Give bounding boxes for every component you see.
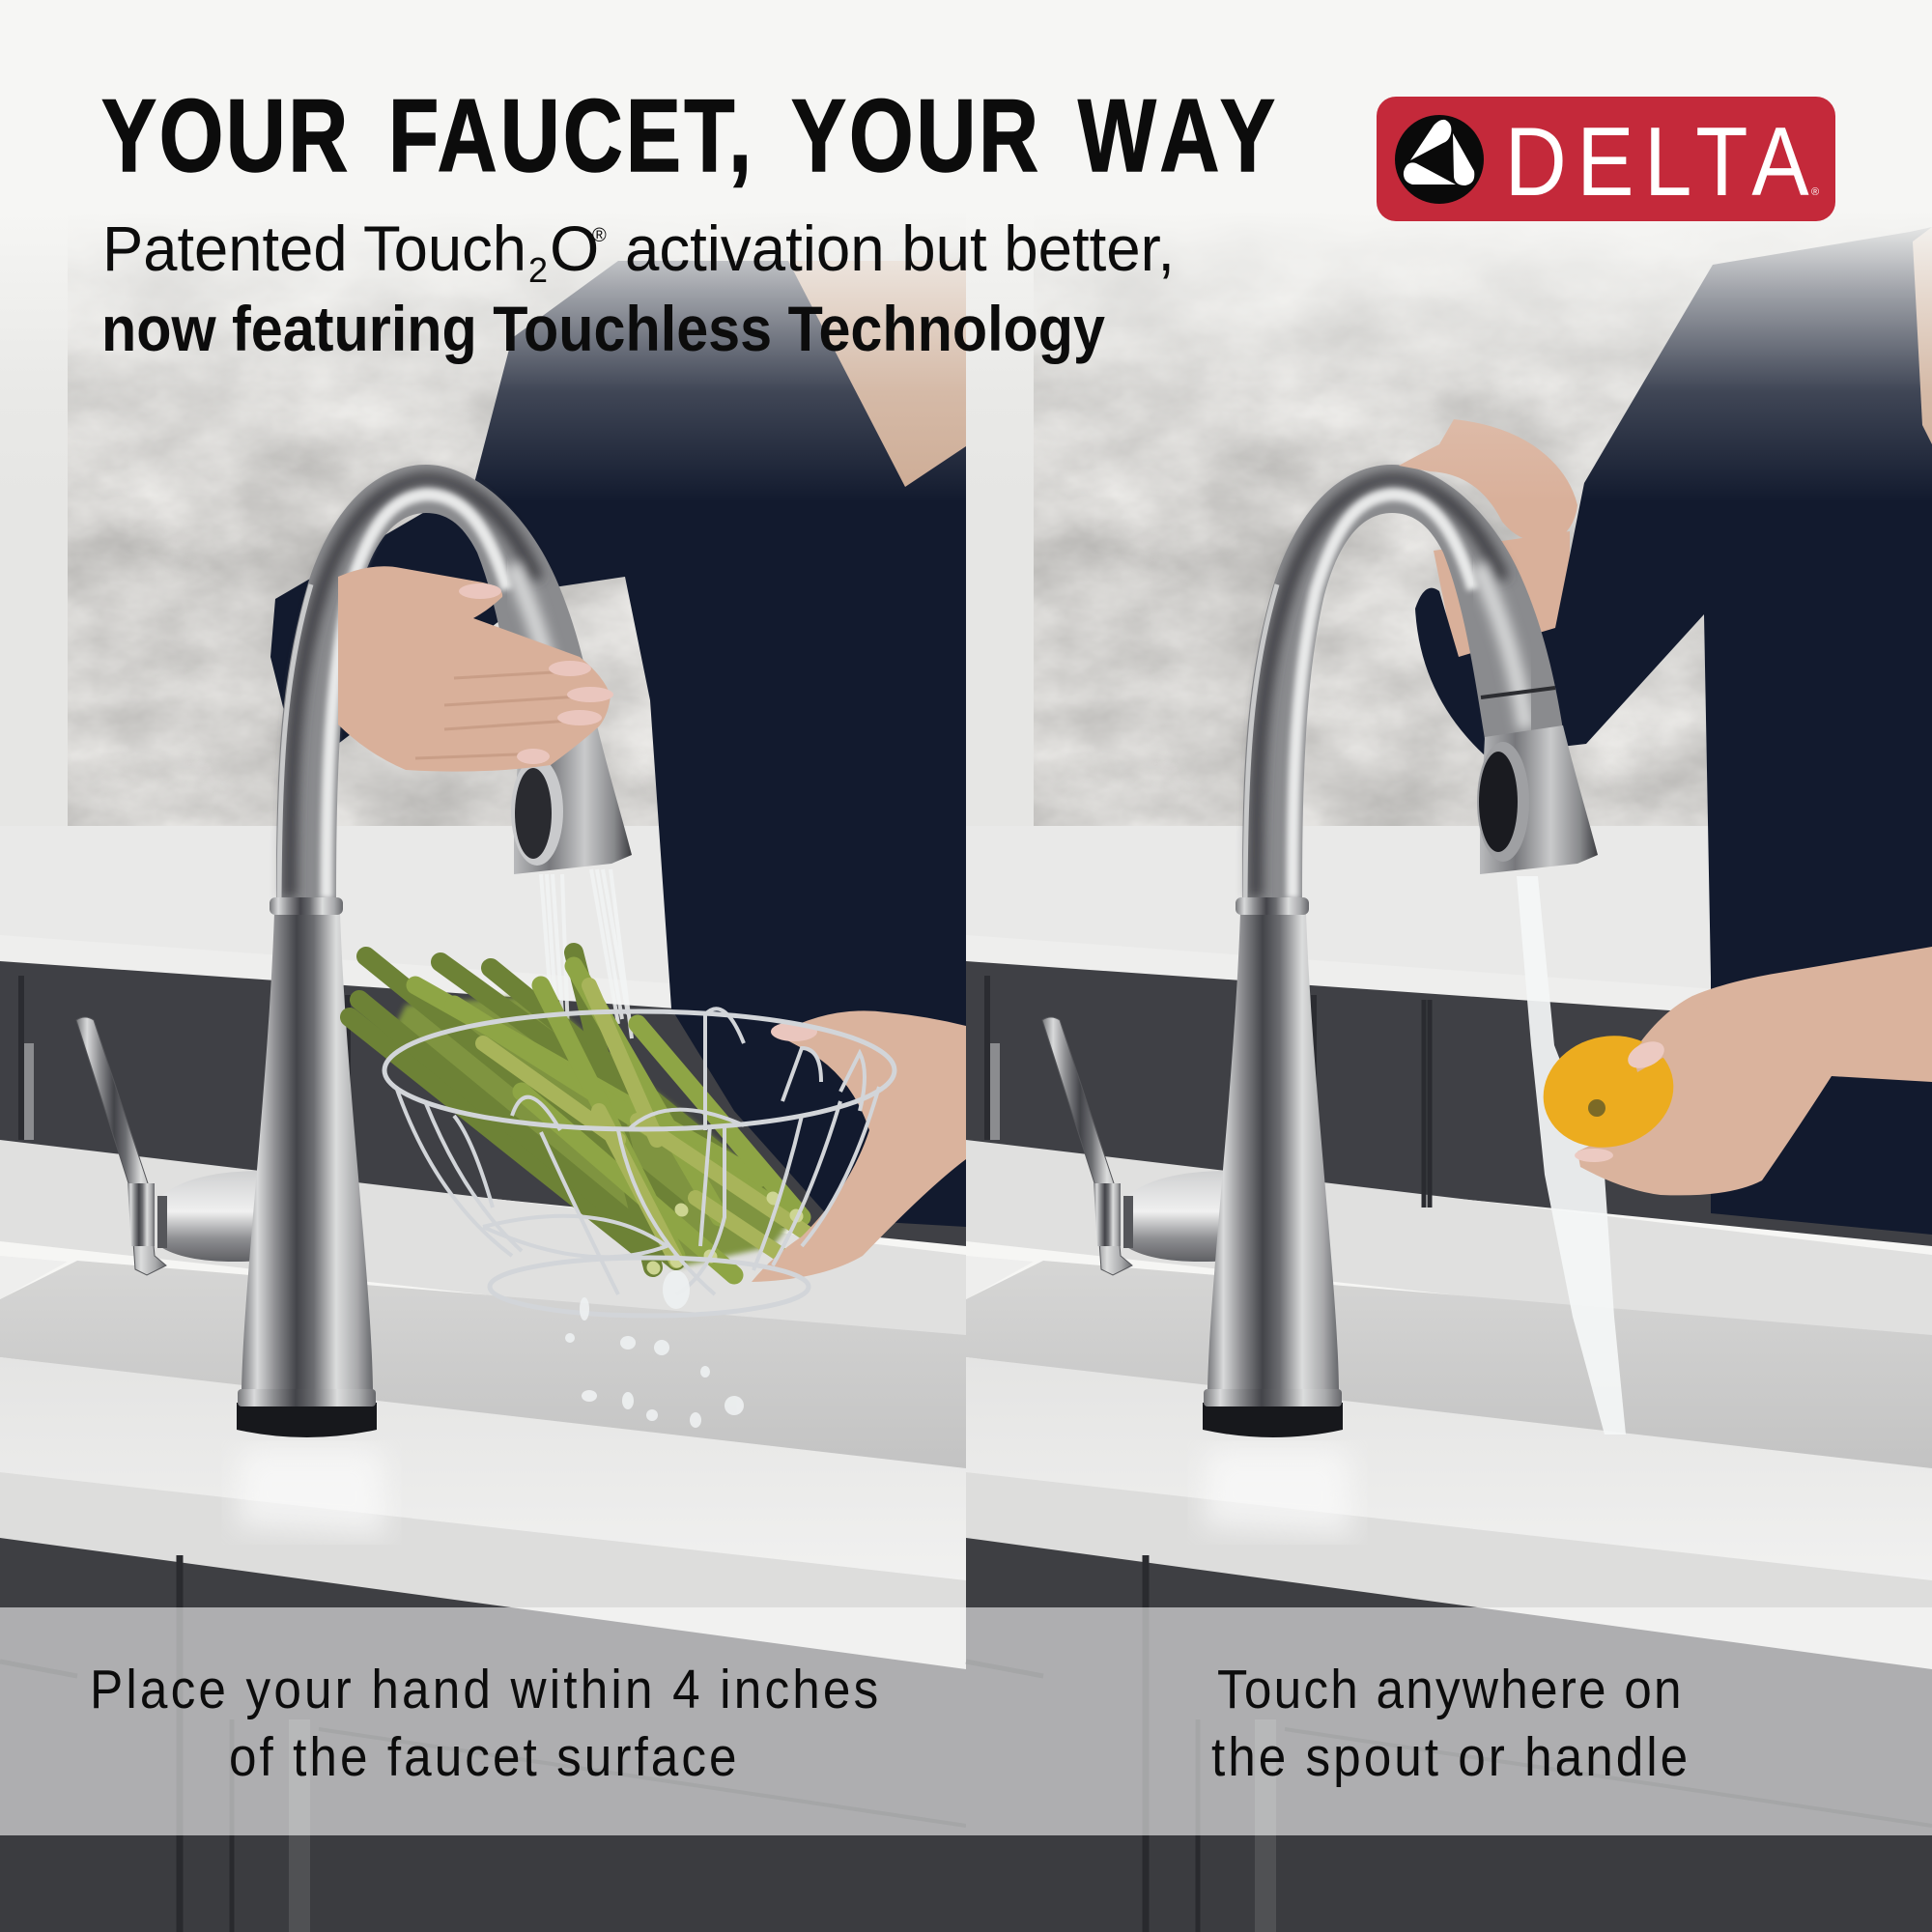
subtitle line 1: 2 [528,250,548,290]
panel: left kitchen scene [0,0,966,1932]
thumb nail [771,1022,817,1041]
sensor right [1477,742,1529,862]
basket hand [752,1010,966,1282]
subtitle line 1: Patented Touch [102,213,526,284]
lemon [1531,1021,1686,1162]
faucet left [76,465,632,1437]
forearm and hand right [1577,947,1932,1195]
title [101,77,1275,193]
neckline skin right [1913,227,1932,444]
logo: Delta: DELTA [1505,108,1809,216]
asparagus bunch [350,952,811,1275]
subtitle line 2: now featuring Touchless Technology [101,293,1105,364]
subtitle line 1: ® [592,225,607,246]
caption band [0,1607,1932,1835]
caption left [90,1660,878,1788]
neckline skin left [788,261,966,487]
caption right: Touch anywhere on [1217,1660,1682,1720]
kitchen background right [966,0,1932,1932]
forearm skin behind faucet [1434,531,1570,676]
hand left [338,566,613,772]
spray head seam [1481,688,1555,697]
lemon hand nails [1575,1037,1668,1162]
title: YOUR [791,77,1038,193]
subtitle line 1: O [550,213,599,284]
water streams left [541,869,632,1038]
panel: right kitchen scene [966,0,1932,1932]
subtitle line 1: activation but better, [625,213,1175,284]
title: WAY [1078,77,1275,193]
subtitle line 1 [102,213,1175,290]
asparagus mass [386,995,802,1267]
hand on spout [1399,419,1577,543]
caption left: of the faucet surface [229,1727,737,1788]
caption left: Place your hand within 4 inches [90,1660,878,1720]
person torso right [1415,227,1932,1235]
water stream right [1517,876,1626,1435]
caption right [1211,1660,1688,1788]
title: YOUR [101,77,348,193]
kitchen background left [0,0,966,1932]
person torso left [270,261,966,1227]
top white fade [0,0,1932,502]
title: FAUCET, [388,77,752,193]
thumb hand overlap [1633,996,1729,1072]
bottom dark band [0,1835,1932,1932]
faucet right [1042,465,1598,1437]
sensor left [511,757,563,866]
wire basket [384,1009,895,1316]
logo: Delta: ® [1811,186,1819,198]
water droplets left [565,1270,744,1428]
logo: Delta [1377,97,1835,221]
caption right: the spout or handle [1211,1727,1688,1788]
upper cabinet door right [1424,1000,1430,1208]
